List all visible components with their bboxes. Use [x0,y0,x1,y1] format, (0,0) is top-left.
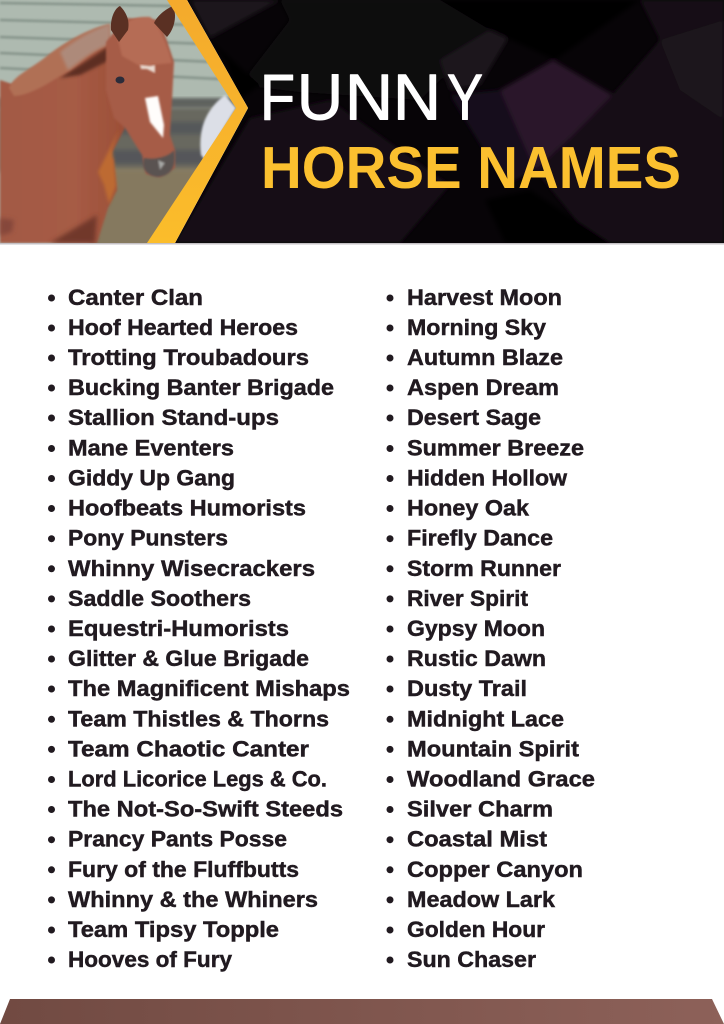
list: left column [68,285,350,972]
list: right column: Autumn Blaze [407,345,563,370]
list: right column: Firefly Dance [407,526,553,551]
list: right column: Dusty Trail [407,676,527,701]
list: left column: Trotting Troubadours [68,345,309,370]
list: left column: Fury of the Fluffbutts [68,857,299,882]
list: right column: Summer Breeze [407,436,584,460]
horse head [106,18,175,177]
list: left column: Team Chaotic Canter [68,736,309,761]
list: right column: Silver Charm [407,796,553,822]
list: right column: Copper Canyon [407,857,583,882]
horse eye [116,76,124,84]
list: left column: Stallion Stand-ups [68,405,279,430]
list: right column: Gypsy Moon [407,616,545,641]
list: left column: Hoof Hearted Heroes [68,315,298,340]
title: Funny [260,60,483,134]
list: left column: Pony Punsters [68,526,228,551]
list: left column: Prancy Pants Posse [68,827,287,852]
horse mane [9,24,110,96]
list: right column: Midnight Lace [407,706,564,731]
list: right column: Desert Sage [407,405,541,430]
list: right column: Meadow Lark [407,887,556,912]
list: right column: Woodland Grace [407,766,595,792]
list: right column [407,285,595,972]
list: right column: Rustic Dawn [407,646,546,671]
horse photo [0,0,240,248]
list: right column: Sun Chaser [407,947,536,972]
title: Horse Names: HORSE NAMES [261,135,681,201]
list: left column: Lord Licorice Legs & Co. [68,766,327,792]
list: right column: Hidden Hollow [407,466,568,490]
horse body [0,40,125,243]
list: left column: Team Tipsy Topple [68,917,279,942]
list: right column: Harvest Moon [407,285,562,310]
dark panel [175,0,724,243]
list: right column: River Spirit [407,586,529,611]
list: left column: Hoofbeats Humorists [68,496,306,520]
list: right column: Mountain Spirit [407,736,580,761]
title: Funny: U [297,60,343,134]
footer band [0,999,724,1024]
list: right column: Morning Sky [407,315,547,340]
list: left column: Whinny & the Whiners [68,887,318,912]
bullets: right column [386,294,394,964]
banner bottom edge [0,243,724,244]
list: left column: Giddy Up Gang [68,466,235,490]
list: right column: Storm Runner [407,556,561,581]
list: left column: Canter Clan [68,285,203,310]
list: right column: Aspen Dream [407,375,559,400]
list: left column: The Not-So-Swift Steeds [68,796,343,822]
list: left column: Equestri-Humorists [68,616,289,641]
bullets: left column [48,294,55,964]
list: left column: Bucking Banter Brigade [68,375,334,400]
list: left column: Glitter & Glue Brigade [68,646,309,671]
gold chevron [147,0,248,243]
list: left column: The Magnificent Mishaps [68,676,350,701]
title: Funny: N [345,60,393,134]
horse muzzle [143,150,175,177]
list: right column: Honey Oak [407,496,530,520]
title: Funny: Y [447,60,483,134]
white horse behind [200,95,236,160]
list: left column: Saddle Soothers [68,586,251,611]
title: Funny: N [393,60,441,134]
list: left column: Whinny Wisecrackers [68,556,315,581]
list: left column: Hooves of Fury [68,947,233,972]
title: Funny: F [260,60,295,134]
list: left column: Team Thistles & Thorns [68,706,329,731]
list: right column: Golden Hour [407,917,545,942]
header banner [0,0,724,248]
horse blaze [145,96,164,138]
list: left column: Mane Eventers [68,436,234,460]
horse ears [111,6,129,42]
list: right column: Coastal Mist [407,827,548,852]
